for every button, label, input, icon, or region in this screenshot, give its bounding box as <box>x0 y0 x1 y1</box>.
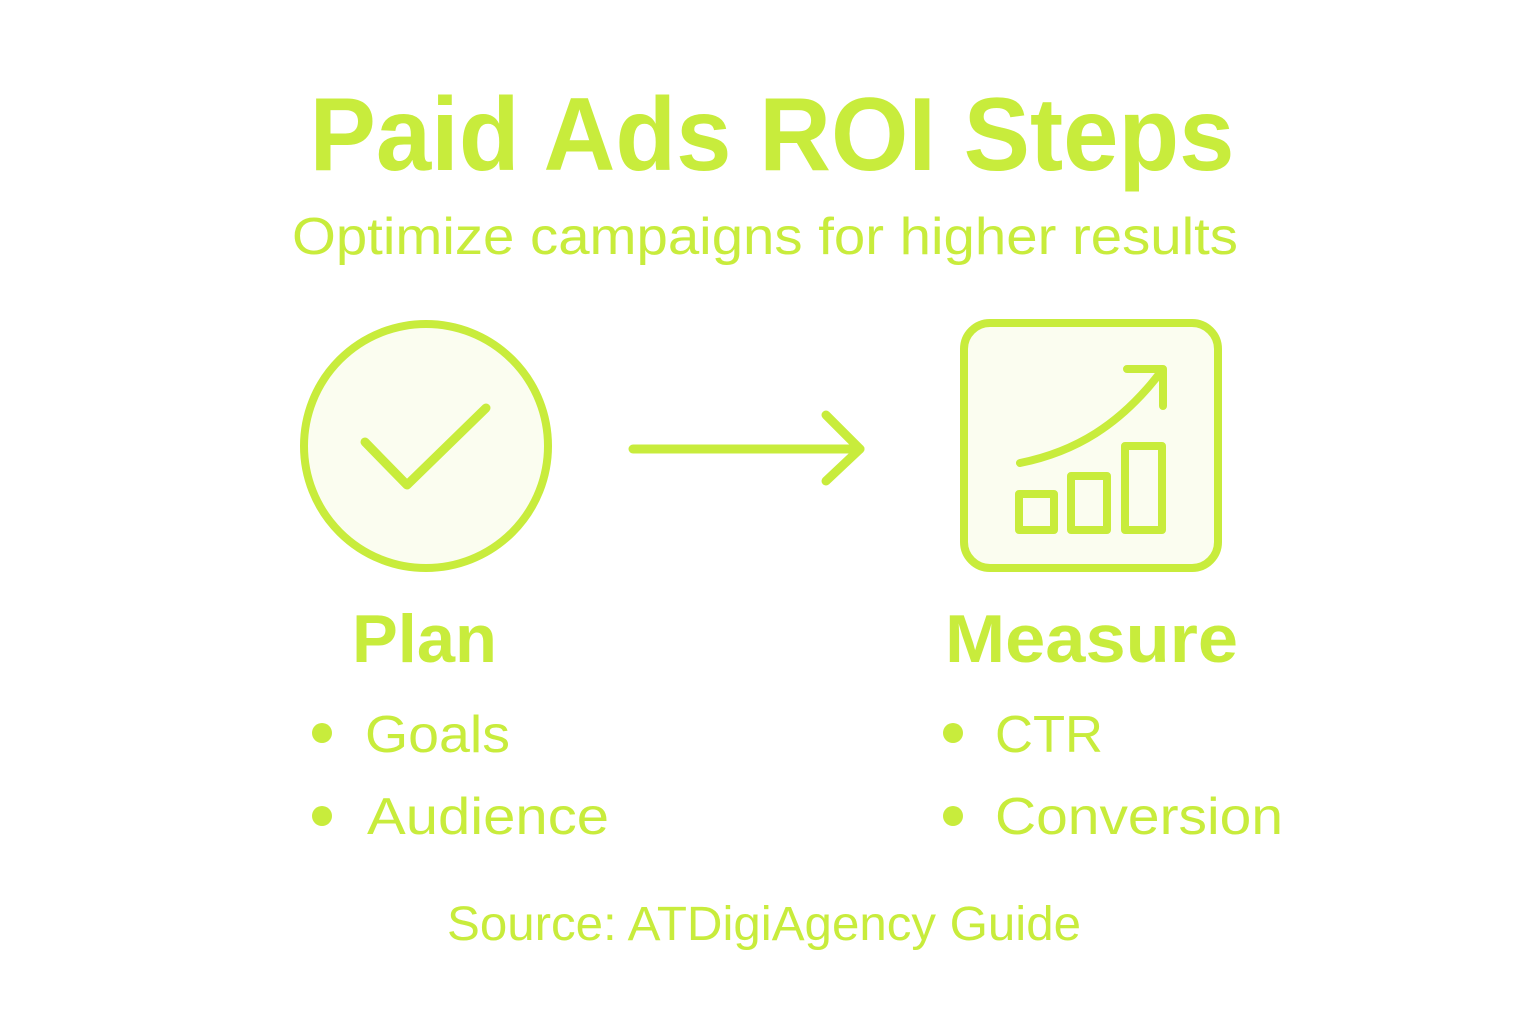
arrow <box>633 415 860 481</box>
heading: Plan: Plan <box>352 601 497 677</box>
list: Plan bullets: Audience <box>367 788 609 846</box>
list: Measure bullets: Conversion <box>995 788 1283 846</box>
list: Measure bullets: CTR <box>995 706 1103 764</box>
subtitle: Optimize campaigns for higher results <box>292 208 1238 266</box>
list: Plan bullets: Goals <box>365 706 510 764</box>
source: Source: ATDigiAgency Guide <box>447 898 1081 951</box>
title: Paid Ads ROI Steps <box>310 77 1234 193</box>
list: Plan bullets <box>312 706 609 846</box>
icon: growth chart <box>964 323 1218 568</box>
heading: Measure: Measure <box>945 601 1238 677</box>
icon: check circle <box>304 324 548 568</box>
list: Measure bullets <box>943 706 1283 846</box>
